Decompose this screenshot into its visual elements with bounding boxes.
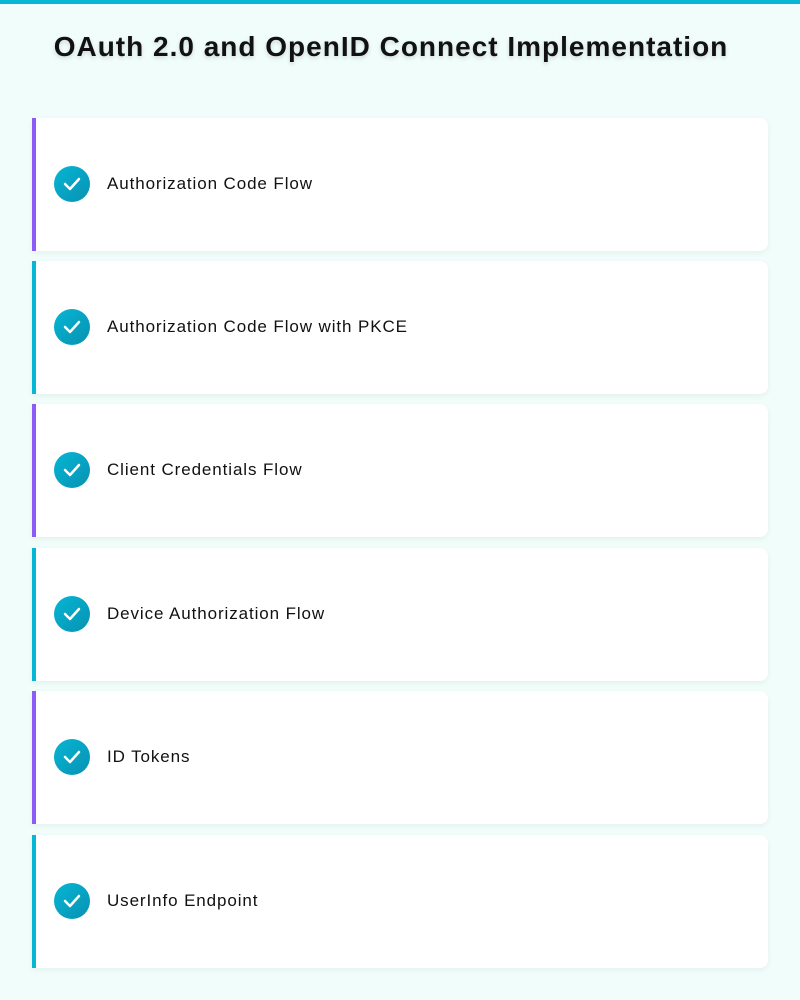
title: OAuth 2.0 and OpenID Connect Implementation (54, 31, 728, 62)
card: UserInfo Endpoint: UserInfo Endpoint (107, 891, 258, 910)
card: PKCE (32, 261, 768, 394)
card: PKCE: Authorization Code Flow with PKCE (107, 317, 408, 336)
card: Device Authorization (32, 548, 768, 681)
card: ID Tokens (32, 691, 768, 824)
card: UserInfo Endpoint (32, 835, 768, 968)
card: Client Credentials (32, 404, 768, 537)
card: Authorization Code Flow (32, 118, 768, 251)
card: Client Credentials: Client Credentials Flow (107, 460, 302, 479)
card: Device Authorization: Device Authorization Flow (107, 604, 325, 623)
card: Authorization Code Flow: Authorization Code Flow (107, 174, 313, 193)
card: ID Tokens: ID Tokens (107, 747, 190, 766)
